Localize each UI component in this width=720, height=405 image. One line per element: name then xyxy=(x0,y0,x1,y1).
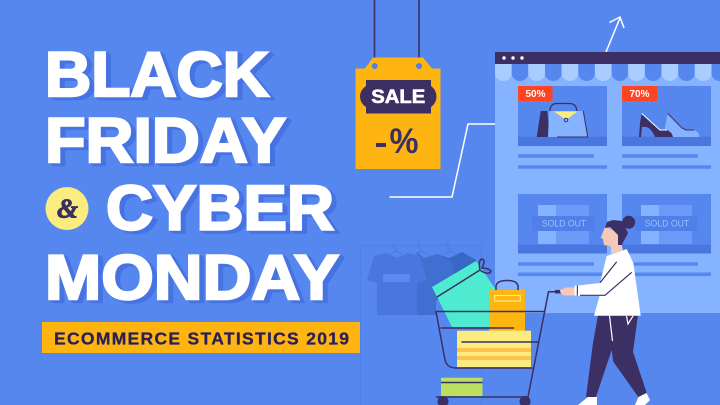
sale tag xyxy=(356,0,440,169)
hair xyxy=(605,216,635,245)
sold out card left xyxy=(518,194,607,254)
shoes xyxy=(578,393,650,405)
gift box xyxy=(432,259,497,327)
dark shoe icon xyxy=(639,114,673,137)
shirt: front xyxy=(367,253,427,315)
minus percent xyxy=(376,122,418,161)
jacket xyxy=(574,249,641,341)
discount label: 50% xyxy=(525,89,546,100)
lower product lines xyxy=(518,264,711,274)
connector line xyxy=(390,124,495,197)
orange shopping bag xyxy=(489,280,525,331)
discount label: 70% xyxy=(629,89,650,100)
storefront window xyxy=(495,52,720,313)
title: Black Friday & Cyber Monday: FRIDAY xyxy=(45,106,286,176)
awning xyxy=(495,64,720,81)
shopping cart with goods xyxy=(432,259,562,405)
shirt label xyxy=(383,274,410,282)
title: Black Friday & Cyber Monday: MONDAY xyxy=(45,243,339,313)
handbag icon xyxy=(537,104,588,137)
growth arrow xyxy=(606,17,624,52)
hand xyxy=(560,288,575,296)
product card: handbag 50% xyxy=(518,86,607,146)
minus percent: % xyxy=(390,122,418,161)
cart frame xyxy=(436,292,562,405)
subtitle banner: ECOMMERCE STATISTICS 2019 xyxy=(54,329,349,349)
green box xyxy=(441,378,482,396)
ampersand badge xyxy=(46,187,88,230)
product lines xyxy=(518,156,711,167)
SALE badge xyxy=(360,80,436,114)
ampersand badge: & xyxy=(57,194,78,224)
browser top bar xyxy=(495,52,720,64)
hangers xyxy=(390,244,456,254)
light shoe icon xyxy=(665,114,700,137)
product card: shoes 70% xyxy=(622,86,711,146)
sold out card left: SOLD OUT xyxy=(542,219,586,230)
title: Black Friday & Cyber Monday: BLACK xyxy=(45,40,269,110)
subtitle banner xyxy=(42,322,360,353)
tag strings xyxy=(374,0,419,66)
shopper woman xyxy=(560,216,650,405)
shirt: back xyxy=(436,252,478,300)
clothes rack with shirts xyxy=(360,244,482,405)
yellow striped box xyxy=(457,331,531,367)
title: Black Friday & Cyber Monday: CYBER xyxy=(106,173,334,243)
sold out card right: SOLD OUT xyxy=(645,219,689,230)
neck and face xyxy=(601,227,623,254)
title: Black Friday & Cyber Monday xyxy=(45,40,339,313)
shirt: middle xyxy=(417,252,456,315)
trousers xyxy=(586,315,647,397)
sold out card right xyxy=(622,194,711,254)
SALE badge: SALE xyxy=(371,87,425,108)
